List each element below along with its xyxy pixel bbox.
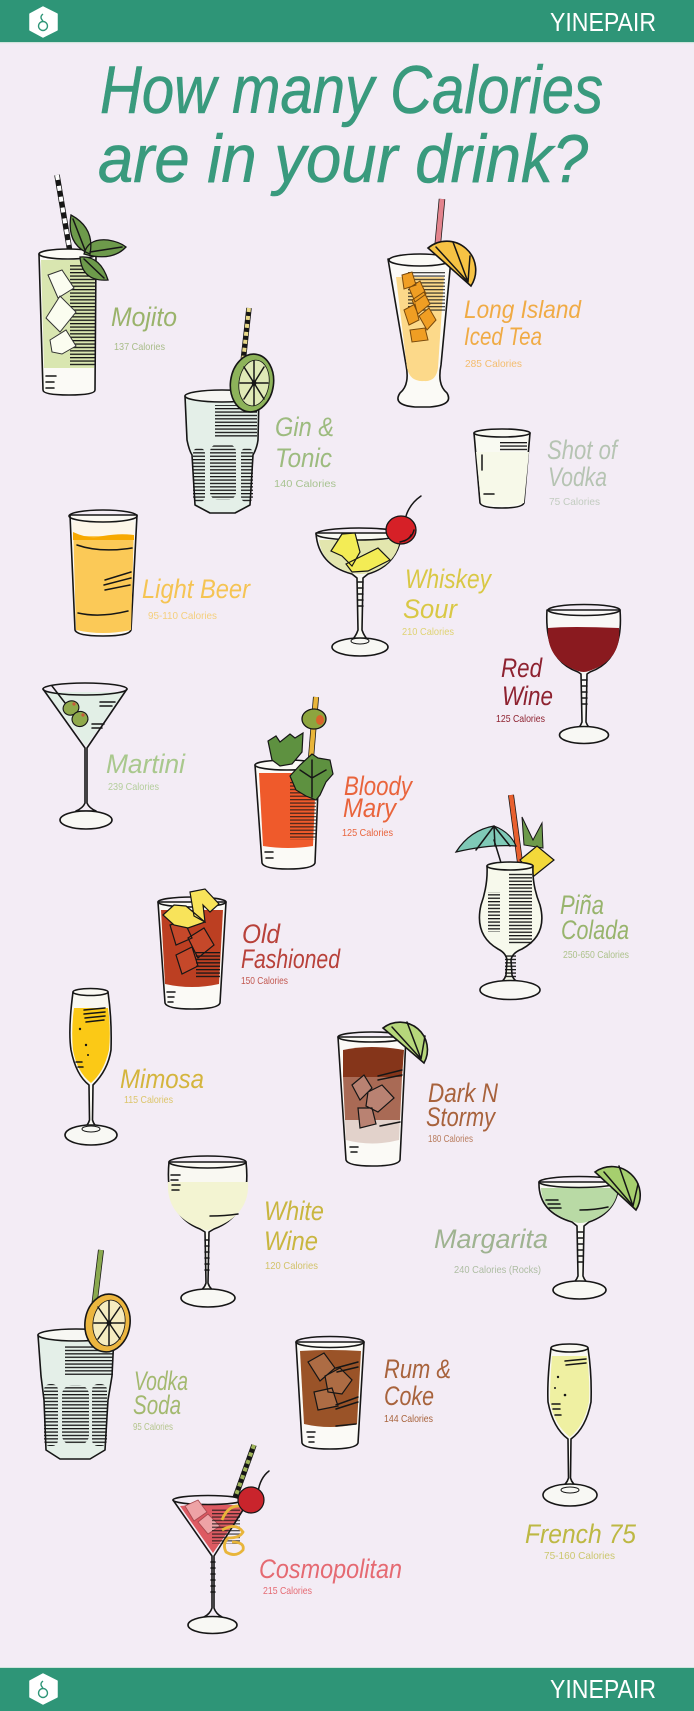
label: Mojito: 137 Calories [114,341,165,353]
label: Rum and Coke [384,1354,451,1425]
label: Piña Colada: Colada [561,915,629,945]
label: Gin and Tonic: 140 Calories [274,478,336,490]
label: Cosmopolitan: Cosmopolitan [259,1554,402,1584]
icon: rum and coke glass [296,1336,364,1449]
icon: vodka soda glass [38,1250,134,1459]
label: White Wine [264,1196,324,1272]
label: Whiskey Sour: Sour [403,594,458,624]
icon: martini glass [43,683,127,829]
label: Rum and Coke: Coke [384,1381,434,1411]
label: Dark N Stormy: 180 Calories [428,1133,473,1145]
label: Margarita: 240 Calories (Rocks) [454,1264,541,1276]
label: Shot of Vodka: 75 Calories [549,496,600,508]
drink: Martini [43,683,186,829]
label: Dark N Stormy: Dark N [428,1078,498,1108]
label: Long Island Iced Tea: Long Island [464,296,582,324]
label: Mojito [111,302,177,353]
label: Long Island Iced Tea [464,296,582,370]
icon: mimosa flute [65,988,117,1145]
label: French 75: French 75 [525,1519,637,1549]
drink: White Wine [168,1156,324,1307]
label: Mimosa [120,1064,204,1106]
label: Dark N Stormy: Stormy [426,1102,496,1132]
drink: Mojito [39,175,177,395]
label: Shot of Vodka [547,435,619,508]
drink: Rum and Coke [296,1336,451,1449]
drink: Light Beer [69,510,251,636]
drink: Dark N Stormy [338,1022,498,1166]
footer logo wordmark: YINEPAIR [550,1674,656,1704]
label: Whiskey Sour: Whiskey [405,564,492,594]
label: White Wine: White [264,1196,324,1226]
label: Cosmopolitan [259,1554,402,1597]
drink: Bloody Mary [255,697,413,869]
drink: Shot of Vodka [474,429,619,508]
label: Mimosa: Mimosa [120,1064,204,1094]
label: Long Island Iced Tea: Iced Tea [464,323,542,351]
label: Old Fashioned [241,919,341,987]
drink: Long Island Iced Tea [388,199,582,407]
title [98,52,603,197]
label: Bloody Mary: Mary [343,793,397,823]
label: Light Beer [142,574,251,622]
icon: champagne flute [543,1344,597,1506]
label: Piña Colada [560,890,629,961]
icon: cosmopolitan glass [173,1445,269,1634]
label: Bloody Mary [342,771,413,839]
drink: Red Wine [496,604,620,744]
icon: coupe glass with cherry [316,496,421,656]
icon: red wine glass [547,604,620,744]
drink: Cosmopolitan [173,1445,402,1634]
label: Whiskey Sour [402,564,492,638]
icon: shot glass [474,429,530,508]
label: Red Wine: Wine [502,681,553,711]
logo wordmark: YINEPAIR [550,7,656,37]
label: Old Fashioned: 150 Calories [241,975,288,987]
label: Cosmopolitan: 215 Calories [263,1585,312,1597]
icon: mojito glass [39,175,126,395]
label: Old Fashioned: Old [242,919,281,949]
label: Red Wine: 125 Calories [496,713,545,725]
label: Shot of Vodka: Shot of [547,435,619,465]
label: French 75: 75-160 Calories [544,1550,615,1562]
label: Vodka Soda: 95 Calories [133,1421,173,1433]
label: Light Beer: 95-110 Calories [148,610,217,622]
label: Margarita [434,1224,548,1276]
header bar [0,0,694,43]
drink: Vodka Soda [38,1250,188,1459]
label: Rum and Coke: 144 Calories [384,1413,433,1425]
label: Vodka Soda: Vodka [134,1366,188,1396]
label: Bloody Mary: Bloody [344,771,413,801]
label: Vodka Soda: Soda [133,1390,181,1420]
label: Gin and Tonic: Gin & [275,412,334,442]
drink: Old Fashioned [158,889,341,1009]
label: Shot of Vodka: Vodka [548,462,607,492]
icon: gin and tonic glass [185,308,277,513]
icon: beer glass [69,510,137,636]
label: White Wine: Wine [264,1226,318,1256]
icon: margarita glass [539,1166,640,1299]
footer bar [0,1667,694,1711]
icon: hexagon logo [30,7,57,37]
icon: white wine glass [168,1156,248,1307]
drink: Piña Colada [456,795,629,1000]
drink: Whiskey Sour [316,496,492,656]
label: Margarita: Margarita [434,1224,548,1254]
icon: bloody mary glass [255,697,333,869]
label: Light Beer: Light Beer [142,574,251,604]
label: Mojito: Mojito [111,302,177,332]
label: Dark N Stormy [426,1078,498,1145]
drink: French 75 [525,1344,637,1562]
label: White Wine: 120 Calories [265,1260,318,1272]
label: Piña Colada: 250-650 Calories [563,949,629,961]
label: Mimosa: 115 Calories [124,1094,173,1106]
label: Piña Colada: Piña [560,890,604,920]
label: Martini: Martini [106,749,186,779]
icon: hurricane glass with umbrella [456,795,554,1000]
label: Whiskey Sour: 210 Calories [402,626,454,638]
label: Martini: 239 Calories [108,781,159,793]
drink: Mimosa [65,988,204,1145]
label: French 75 [525,1519,637,1562]
label: Vodka Soda [133,1366,188,1433]
icon: footer hexagon logo [30,1674,57,1704]
icon: dark and stormy glass [338,1022,427,1166]
title: are in your drink? [98,121,588,197]
drink: Margarita [434,1166,640,1299]
label: Rum and Coke: Rum & [384,1354,451,1384]
label: Gin and Tonic: Tonic [275,443,332,473]
label: Gin and Tonic [274,412,336,490]
label: Long Island Iced Tea: 285 Calories [465,358,522,370]
icon: old fashioned glass [158,889,226,1009]
label: Old Fashioned: Fashioned [241,944,341,974]
label: Bloody Mary: 125 Calories [342,827,393,839]
title: How many Calories [100,52,603,128]
label: Martini [106,749,186,793]
drink: Gin and Tonic [185,308,336,513]
label: Red Wine [496,653,553,725]
icon: long island glass [388,199,476,407]
label: Red Wine: Red [501,653,543,683]
